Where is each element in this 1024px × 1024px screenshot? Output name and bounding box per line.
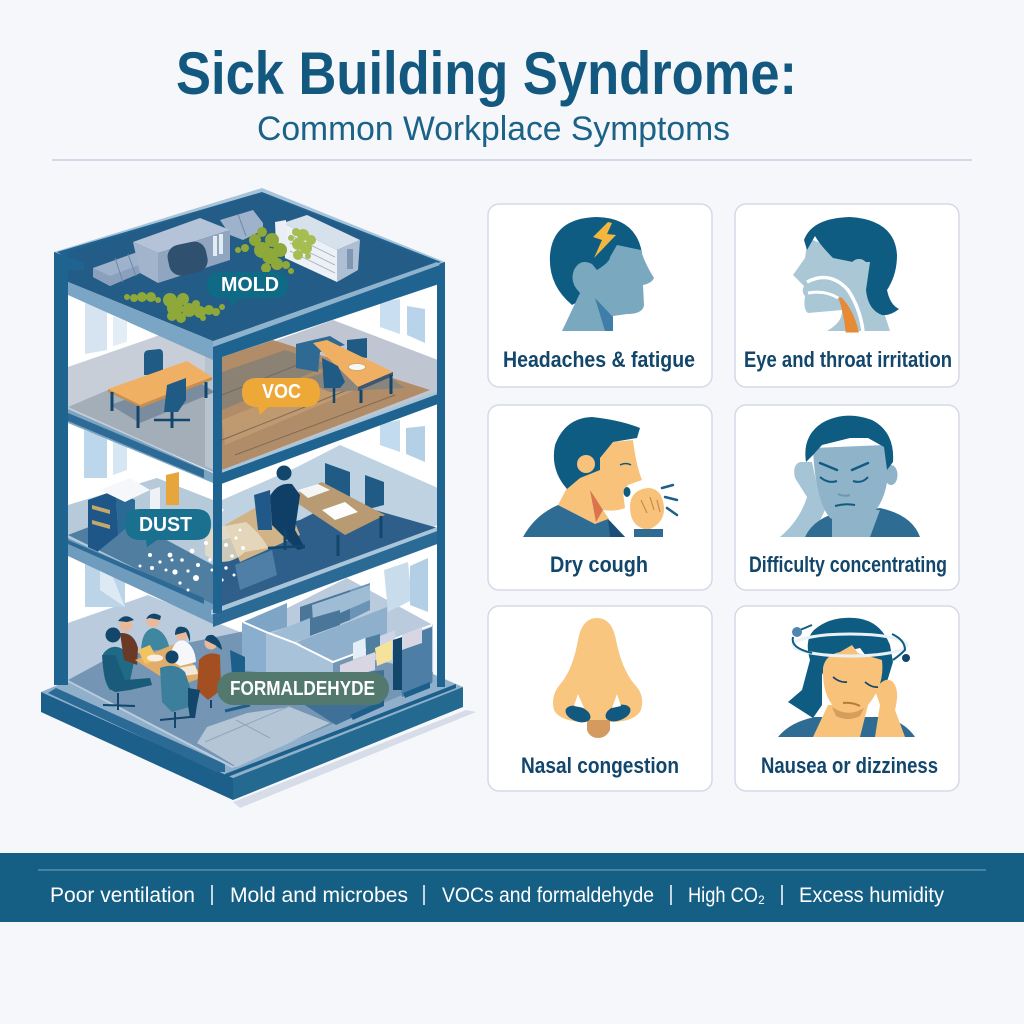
front chair xyxy=(154,378,190,428)
dust cloud xyxy=(138,508,268,592)
empty chairs xyxy=(325,463,384,510)
desk and chairs xyxy=(296,336,393,403)
label: Eye and throat irritation xyxy=(744,347,952,372)
footer band: causes xyxy=(0,853,1024,922)
person with cap xyxy=(118,616,138,665)
office desk with papers xyxy=(288,482,385,556)
icon: man coughing xyxy=(523,417,677,537)
meeting group at table xyxy=(102,614,250,728)
card: dry cough xyxy=(488,405,712,590)
badge: DUST xyxy=(125,509,211,547)
cause: high CO2: High CO₂ xyxy=(688,884,765,907)
top floor left room xyxy=(68,282,215,472)
icon: tired person holding head xyxy=(780,416,920,537)
label: Dry cough xyxy=(550,552,648,577)
front person xyxy=(160,650,200,728)
card: eye and throat irritation xyxy=(735,204,959,387)
label: Nausea or dizziness xyxy=(761,753,938,778)
rooftop condenser unit xyxy=(275,215,360,282)
label: Nasal congestion xyxy=(521,753,679,778)
badge: MOLD: MOLD xyxy=(221,274,279,296)
card: nausea or dizziness xyxy=(735,606,959,791)
structural columns xyxy=(54,252,445,687)
woman at right xyxy=(170,627,196,666)
icon: dizzy woman xyxy=(778,618,915,737)
mold patches xyxy=(124,227,316,323)
cause: VOCs and formaldehyde: VOCs and formaldehyde xyxy=(442,884,654,907)
person in rust sweater xyxy=(197,635,222,708)
badge: FORMALDEHYDE xyxy=(217,672,389,705)
subtitle: Common Workplace Symptoms xyxy=(257,110,730,148)
badge: MOLD xyxy=(207,272,288,307)
label: Headaches & fatigue xyxy=(503,347,695,372)
ground floor room xyxy=(68,538,438,768)
back chair xyxy=(144,349,163,375)
cause: poor ventilation: Poor ventilation xyxy=(50,884,195,907)
table xyxy=(108,361,212,428)
cause: excess humidity: Excess humidity xyxy=(799,884,944,907)
person at back xyxy=(141,614,170,650)
badge: VOC xyxy=(242,378,320,415)
badge: FORMALDEHYDE: FORMALDEHYDE xyxy=(230,678,375,700)
icon: throat profile xyxy=(793,217,899,331)
badge: VOC: VOC xyxy=(262,381,301,403)
seated worker xyxy=(254,466,305,550)
floor slabs xyxy=(68,391,440,627)
person seated left xyxy=(102,628,152,710)
icon: nose xyxy=(553,618,642,738)
title: Sick Building Syndrome: xyxy=(176,40,797,107)
base plinth xyxy=(41,600,463,800)
top floor right room with wood floor xyxy=(222,283,438,470)
card: nasal congestion xyxy=(488,606,712,791)
cause: mold and microbes: Mold and microbes xyxy=(230,884,408,907)
meeting table xyxy=(135,643,203,687)
second floor right room xyxy=(222,404,438,612)
building cutaway illustration xyxy=(41,188,476,808)
icon: head with lightning bolt xyxy=(550,217,654,331)
roof deck xyxy=(54,188,445,360)
label: Difficulty concentrating xyxy=(749,552,947,577)
card: headaches and fatigue xyxy=(488,204,712,387)
badge: DUST: DUST xyxy=(139,514,192,536)
card: difficulty concentrating xyxy=(735,405,959,590)
second floor left room xyxy=(68,420,213,608)
cubicles xyxy=(242,583,432,725)
HVAC air handling unit xyxy=(93,210,263,286)
